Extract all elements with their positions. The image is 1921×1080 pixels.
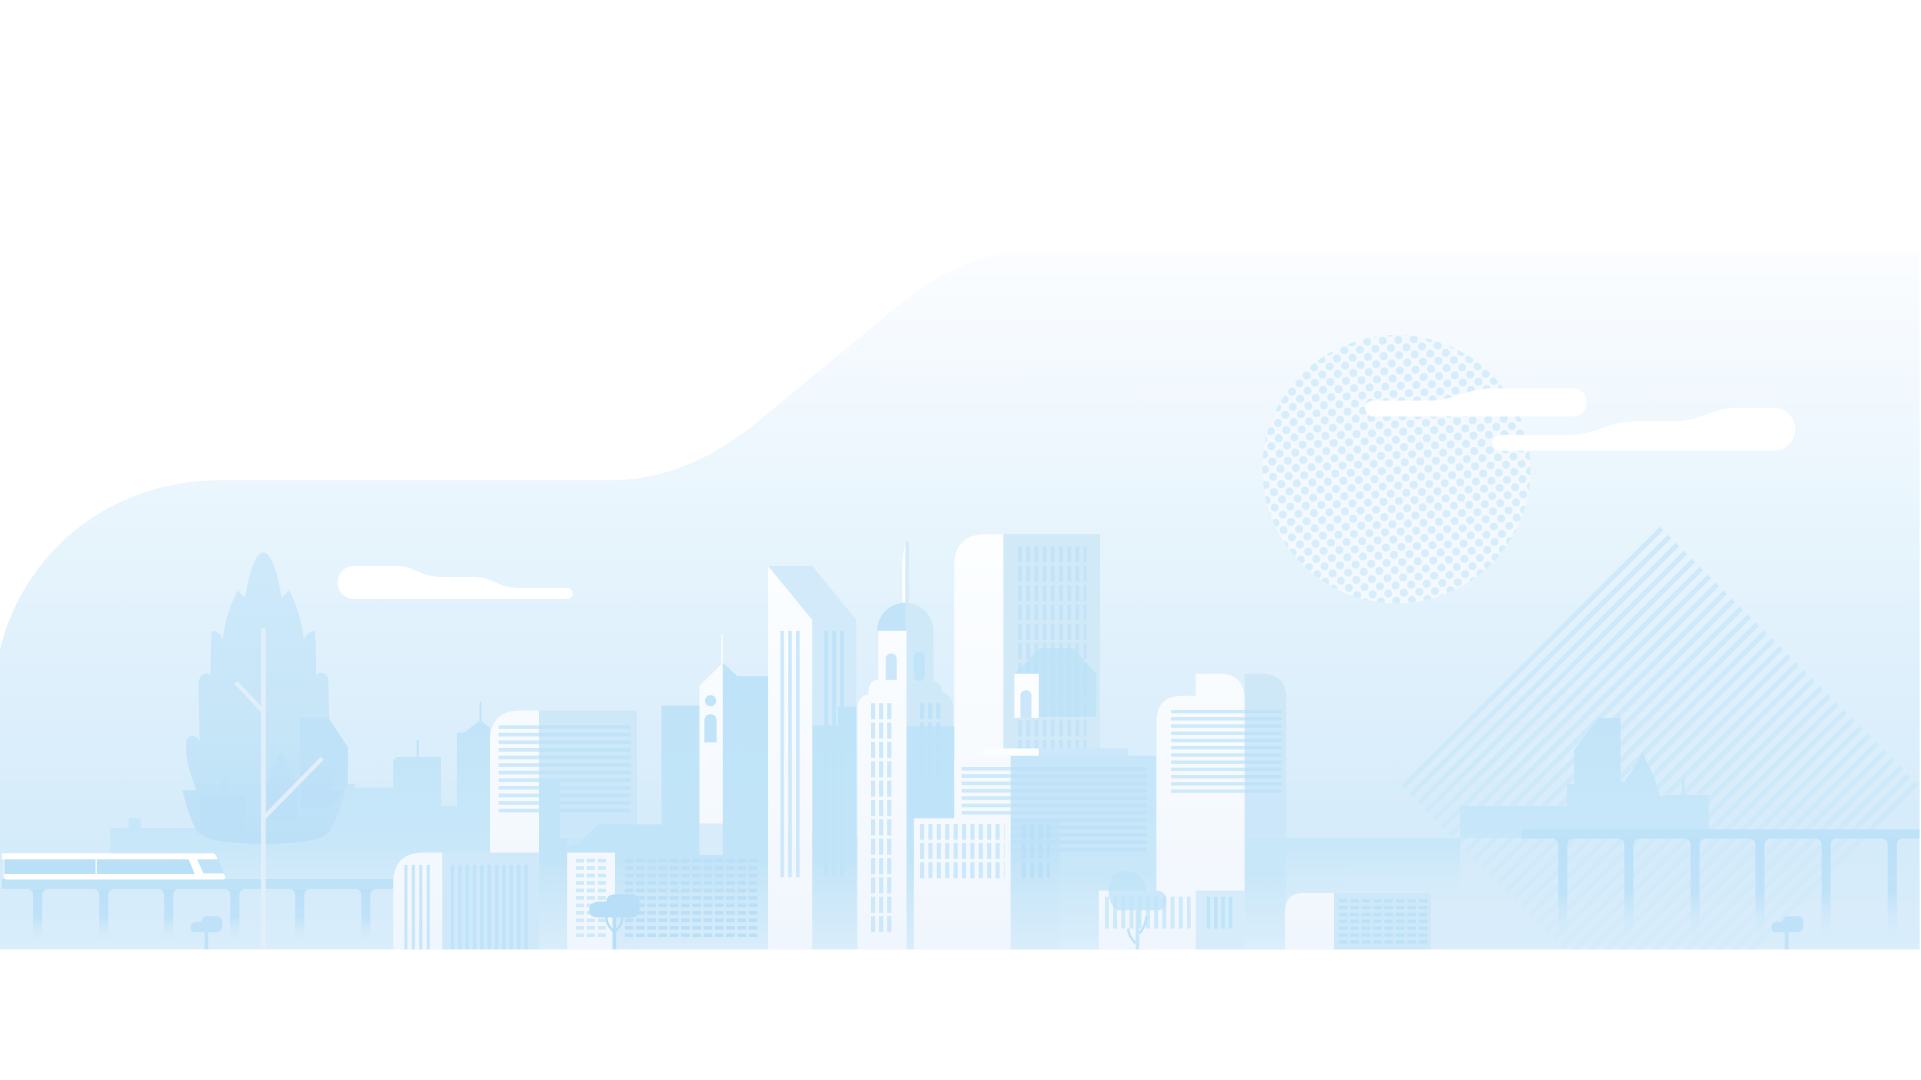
bridge: left elevated rail	[2, 879, 394, 945]
tower base: translucent lower section	[699, 823, 723, 855]
bridge: right elevated rail	[1521, 829, 1920, 946]
tree: small left	[190, 916, 222, 949]
cloud: lower right	[1493, 408, 1795, 451]
tree: small right	[1771, 916, 1803, 949]
silhouette: middle ground band	[490, 838, 1460, 899]
building: block with window grid	[567, 824, 768, 949]
silhouette: right skyline	[1460, 718, 1709, 838]
tree: large leaf-shaped tree	[183, 552, 348, 949]
mountain base fade	[1348, 833, 1920, 949]
cloud: upper right	[1365, 388, 1587, 417]
building: low rounded block with vertical stripes	[393, 853, 539, 949]
building: domed clock tower	[858, 541, 954, 949]
cloud: left	[337, 566, 573, 599]
towers: background blue blocks	[662, 663, 768, 853]
building: small domed block	[1014, 648, 1096, 718]
building: wide striped mid-rise	[954, 748, 1156, 949]
tree: centre right	[1109, 871, 1166, 949]
building: low right block with grid	[1285, 893, 1431, 949]
train	[2, 853, 225, 880]
sun: dotted circle	[1262, 335, 1531, 603]
building: horizontal-striped block	[490, 711, 637, 949]
building: right stepped tower	[1156, 674, 1286, 949]
building: tall rounded tower with grid	[954, 534, 1100, 818]
building: low white block with windows	[914, 818, 1050, 949]
mountain: diagonal striped triangle	[1399, 527, 1920, 949]
tree overlap: buildings seen through foliage	[200, 718, 348, 833]
building: low block with vertical stripes	[1099, 891, 1245, 949]
silhouette: left skyline	[110, 702, 490, 894]
background: sky panel with curved top edge	[0, 251, 1920, 949]
tree: round, in front of block	[589, 894, 639, 949]
building: tall angled tower	[768, 566, 856, 949]
tree trunk and branches	[236, 628, 322, 949]
building: gabled tower with spire	[699, 635, 723, 855]
